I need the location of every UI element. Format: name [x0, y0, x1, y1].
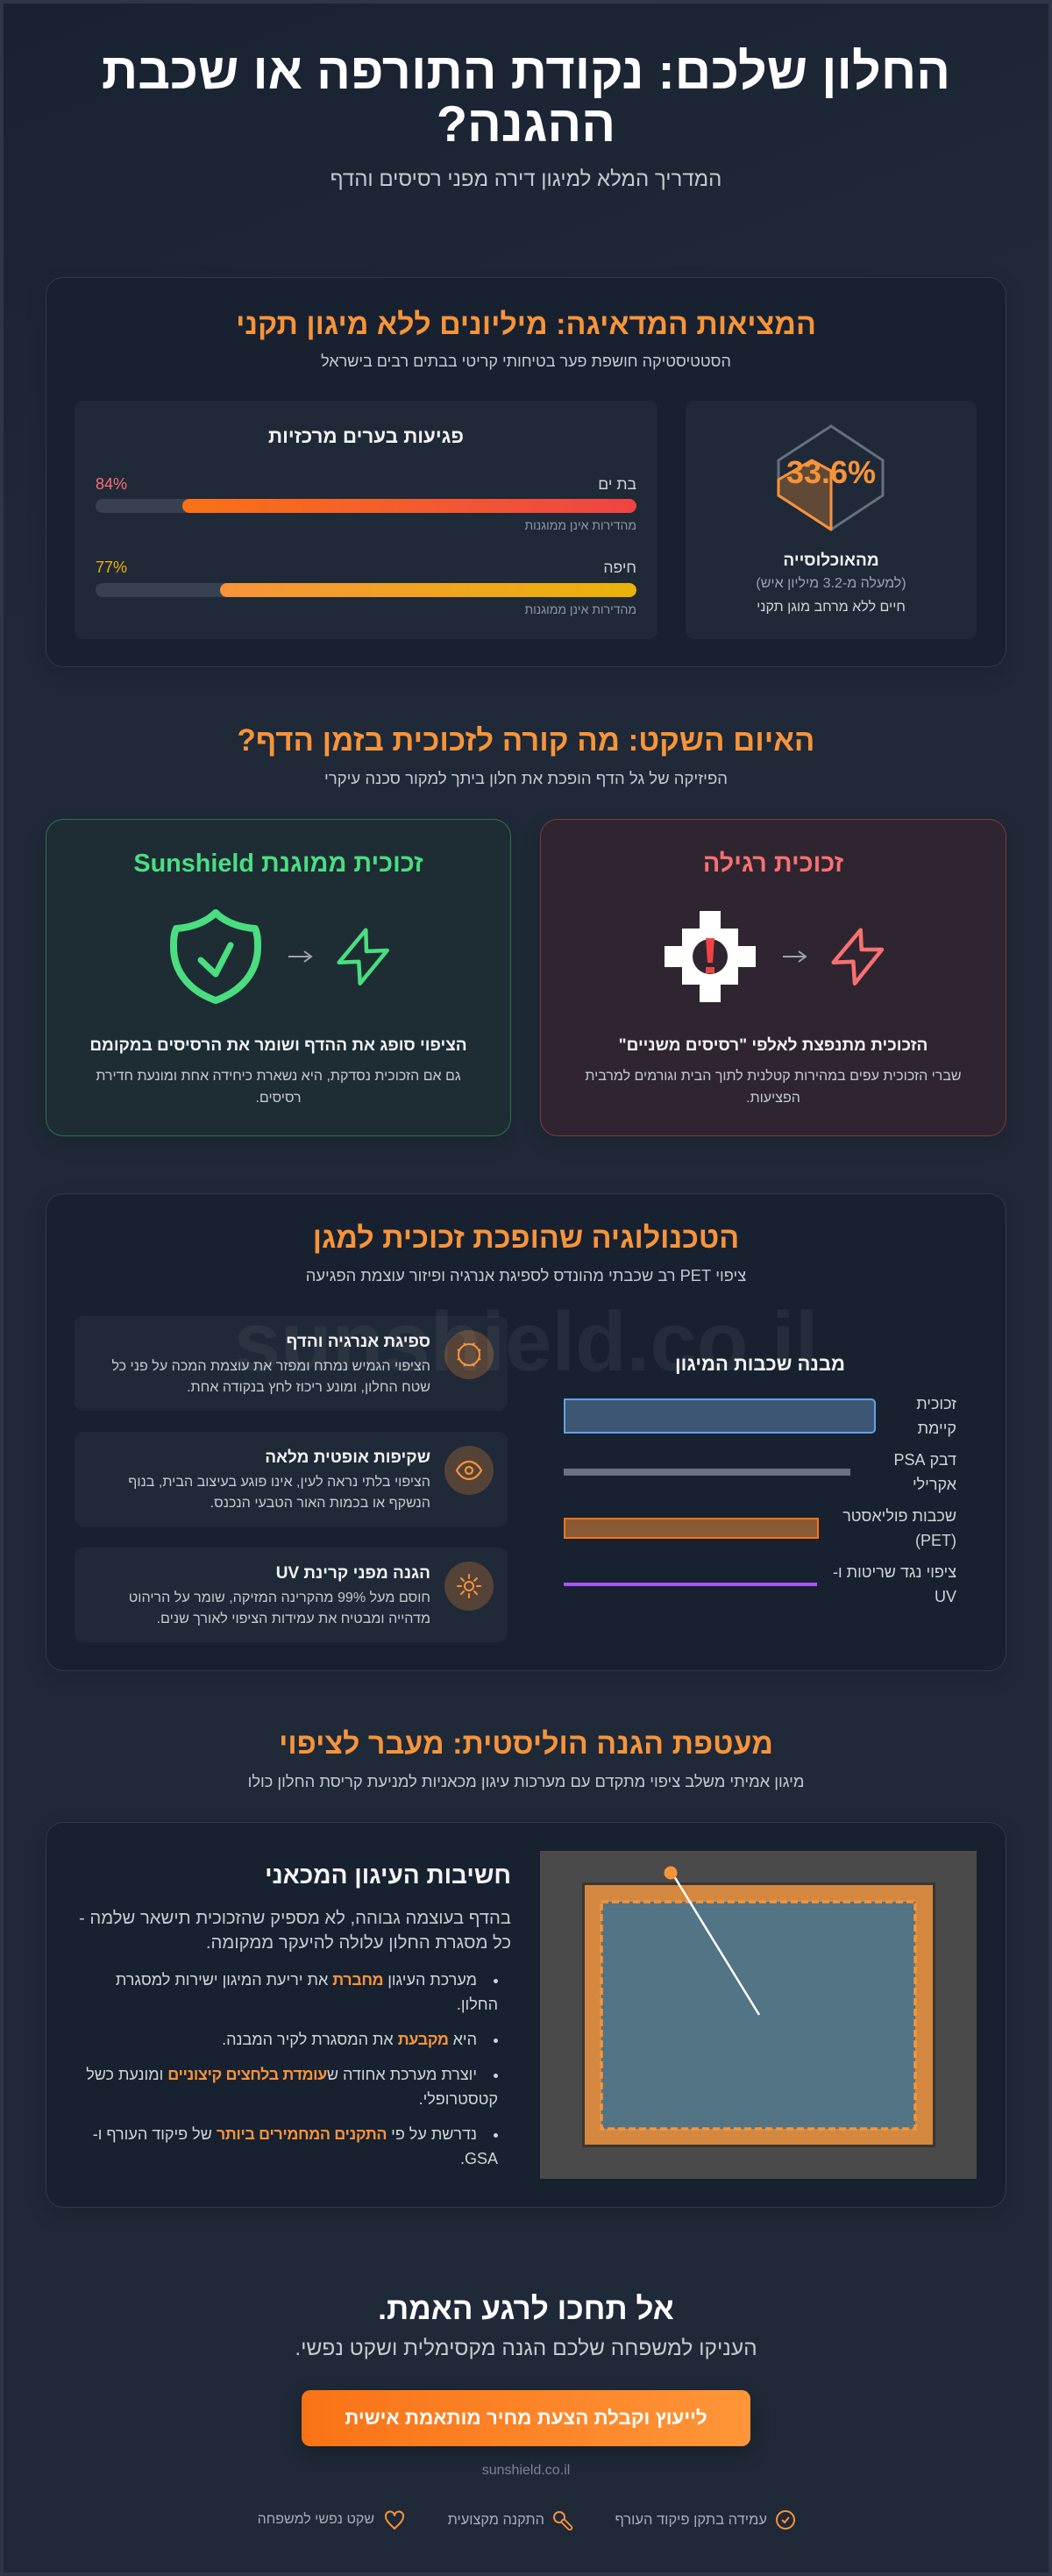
trust badges	[258, 2510, 795, 2530]
panel: city hits	[75, 401, 658, 639]
call to action subheading: העניקו למשפחה שלכם הגנה מקסימלית ושקט נפשי.	[295, 2337, 757, 2360]
feature title: שקיפות אופטית מלאה	[265, 1448, 430, 1467]
label: Bat Yam: בת ים	[598, 475, 636, 493]
icon: warning, arrow and bolt	[665, 911, 884, 1002]
note: Bat Yam: מהדירות אינן ממוגנות	[524, 518, 636, 532]
feature text: שטח החלון, ומונע ריכוז לחץ בנקודה אחת.	[187, 1378, 430, 1394]
heading: holistic protection: מעטפת הגנה הוליסטית: מעבר לציפוי	[279, 1727, 773, 1761]
website: sunshield.co.il	[482, 2463, 570, 2478]
feature text: הציפוי הגמיש נמתח ומפזר את עוצמת המכה על פני כל	[111, 1357, 430, 1373]
feature text	[111, 1357, 430, 1394]
intro text	[79, 1909, 511, 1953]
panel: regular glass	[540, 819, 1006, 1136]
icon: heart	[384, 2511, 405, 2530]
title	[102, 44, 950, 153]
subheading: reality: הסטטיסטיקה חושפת פער בטיחותי קריטי בבתים רבים בישראל	[321, 352, 731, 370]
panel: population stat	[686, 401, 977, 639]
feature: optical clarity	[75, 1432, 508, 1526]
feature title: ספיגת אנרגיה והדף	[287, 1333, 430, 1351]
panel: the alarming reality	[46, 277, 1006, 667]
layer: adhesive	[564, 1469, 850, 1476]
layer: polyester	[564, 1518, 819, 1539]
badge text: התקנה מקצועית	[448, 2512, 544, 2528]
badge: standard	[615, 2510, 795, 2530]
label: glass	[916, 1395, 956, 1437]
title: ההגנה?	[437, 96, 615, 153]
label: adhesive: אקרילי	[913, 1476, 956, 1493]
panel: technology	[46, 1193, 1006, 1671]
feature text	[129, 1589, 430, 1626]
value: 77%: 77%	[96, 559, 127, 576]
heading: city hits: פגיעות בערים מרכזיות	[268, 425, 464, 447]
label: polyester	[842, 1507, 956, 1549]
description: protected glass: גם אם הזכוכית נסדקת, היא נשארת כיחידה אחת ומונעת חדירת	[96, 1069, 461, 1084]
diagram: window frame anchoring	[540, 1851, 977, 2179]
label: glass: זכוכית	[916, 1395, 956, 1413]
heading: technology: הטכנולוגיה שהופכת זכוכית למגן	[313, 1221, 739, 1255]
title: החלון שלכם: נקודת התורפה או שכבת	[102, 44, 950, 100]
label: adhesive	[894, 1451, 956, 1493]
bullet list: יוצרת מערכת אחודה שעומדת בלחצים קיצוניים ומונעת כשל	[86, 2066, 477, 2083]
stat description: חיים ללא מרחב מוגן תקני	[757, 600, 906, 615]
feature title: הגנה מפני קרינת UV	[276, 1564, 430, 1583]
note: Haifa: מהדירות אינן ממוגנות	[524, 602, 636, 616]
subheading: holistic protection: מיגון אמיתי משלב ציפוי מתקדם עם מערכות עיגון מכאניות למניעת קריסת החלון כולו	[248, 1772, 804, 1790]
description: regular glass: הפציעות.	[746, 1091, 800, 1106]
label: glass: קיימת	[918, 1420, 956, 1437]
statement: protected glass: הציפוי סופג את ההדף ושומר את הרסיסים במקומם	[89, 1036, 467, 1055]
bullet list: קטסטרופלי.	[419, 2090, 498, 2108]
intro text: בהדף בעוצמה גבוהה, לא מספיק שהזכוכית תישאר שלמה -	[79, 1909, 511, 1928]
icon: eye	[444, 1446, 494, 1495]
feature: UV protection	[75, 1548, 508, 1642]
subheading: silent threat: הפיזיקה של גל הדף הופכת את חלון ביתך למקור סכנה עיקרי	[324, 769, 728, 787]
subheading: technology: ציפוי PET רב שכבתי מהונדס לספיגת אנרגיה ופיזור עוצמת הפגיעה	[306, 1266, 746, 1284]
feature text: הנשקף או בכמות האור הטבעי הנכנס.	[210, 1494, 430, 1510]
layer: coating	[564, 1583, 817, 1586]
layer: glass	[564, 1398, 876, 1434]
watermark: sunshield.co.il	[234, 1295, 818, 1389]
icon: energy ring	[444, 1330, 494, 1379]
stat note: (למעלה מ-3.2 מיליון איש)	[756, 576, 906, 591]
bar: Haifa	[96, 583, 636, 597]
feature text: חוסם מעל 99% מהקרינה המזיקה, שומר על הריהוט	[129, 1589, 430, 1605]
badge text: עמידה בתקן פיקוד העורף	[615, 2512, 767, 2528]
label: polyester: (PET)	[915, 1532, 956, 1549]
bar: Bat Yam	[96, 499, 636, 513]
description: regular glass	[585, 1069, 962, 1106]
diagram title: מבנה שכבות המיגון	[675, 1353, 845, 1375]
description: protected glass: רסיסים.	[255, 1091, 302, 1106]
diagram: film layers	[564, 1353, 956, 1605]
bullet list	[86, 1971, 498, 2167]
icon: shield, arrow and bolt	[170, 909, 389, 1004]
label: adhesive: דבק PSA	[894, 1451, 956, 1469]
icon: sun	[444, 1562, 494, 1611]
heading: protected glass: זכוכית ממוגנת Sunshield	[133, 850, 423, 878]
bullet list: היא מקבעת את המסגרת לקיר המבנה.	[222, 2031, 477, 2048]
bullet list: נדרשת על פי התקנים המחמירים ביותר של פיקוד העורף ו-	[93, 2125, 477, 2143]
statement: regular glass: הזכוכית מתנפצת לאלפי "רסיסים משניים"	[619, 1036, 928, 1055]
icon: wrench	[553, 2511, 573, 2530]
stat label: מהאוכלוסייה	[783, 551, 879, 570]
label: Haifa: חיפה	[603, 559, 636, 576]
bullet list: החלון.	[457, 1996, 498, 2013]
subtitle: המדריך המלא למיגון דירה מפני רסיסים והדף	[331, 167, 721, 191]
heading: reality: המציאות המדאיגה: מיליונים ללא מיגון תקני	[236, 308, 816, 341]
call to action heading: אל תחכו לרגע האמת.	[378, 2292, 674, 2326]
description: regular glass: שברי הזכוכית עפים במהירות קטלנית לתוך הבית וגורמים למרבית	[585, 1069, 962, 1084]
badge text: שקט נפשי למשפחה	[258, 2512, 374, 2527]
icon: hexagon gauge	[777, 424, 884, 531]
badge: peace of mind	[258, 2511, 405, 2530]
bullet list: GSA.	[460, 2150, 498, 2167]
icon: check circle	[776, 2510, 795, 2530]
intro text: כל מסגרת החלון עלולה להיעקר ממקומה.	[206, 1933, 511, 1953]
feature text: הציפוי בלתי נראה לעין, אינו פוגע בעיצוב הבית, בנוף	[128, 1473, 430, 1489]
stat: 33.6%: 33.6%	[786, 454, 876, 490]
feature: energy absorption	[75, 1316, 508, 1411]
panel: protected glass	[46, 819, 511, 1136]
button	[302, 2390, 750, 2446]
badge: installation	[448, 2511, 573, 2530]
feature text	[128, 1473, 430, 1510]
label: coating: UV	[935, 1588, 956, 1605]
panel: mechanical anchoring	[46, 1822, 1006, 2208]
feature text: מדהייה ומבטיח את עמידות הציפוי לאורך שנים.	[157, 1610, 430, 1626]
heading: mechanical anchoring: חשיבות העיגון המכאני	[265, 1861, 511, 1889]
bullet list: מערכת העיגון מחברת את יריעת המיגון ישירות למסגרת	[116, 1971, 477, 1989]
description: protected glass	[96, 1069, 461, 1106]
label: coating	[833, 1563, 956, 1605]
button: לייעוץ וקבלת הצעת מחיר מותאמת אישית	[345, 2407, 707, 2429]
heading: silent threat: האיום השקט: מה קורה לזכוכית בזמן הדף?	[238, 723, 814, 758]
label: polyester: שכבות פוליאסטר	[842, 1507, 956, 1525]
heading: regular glass: זכוכית רגילה	[703, 850, 843, 878]
label: coating: ציפוי נגד שריטות ו-	[833, 1563, 956, 1581]
value: 84%: 84%	[96, 475, 127, 493]
